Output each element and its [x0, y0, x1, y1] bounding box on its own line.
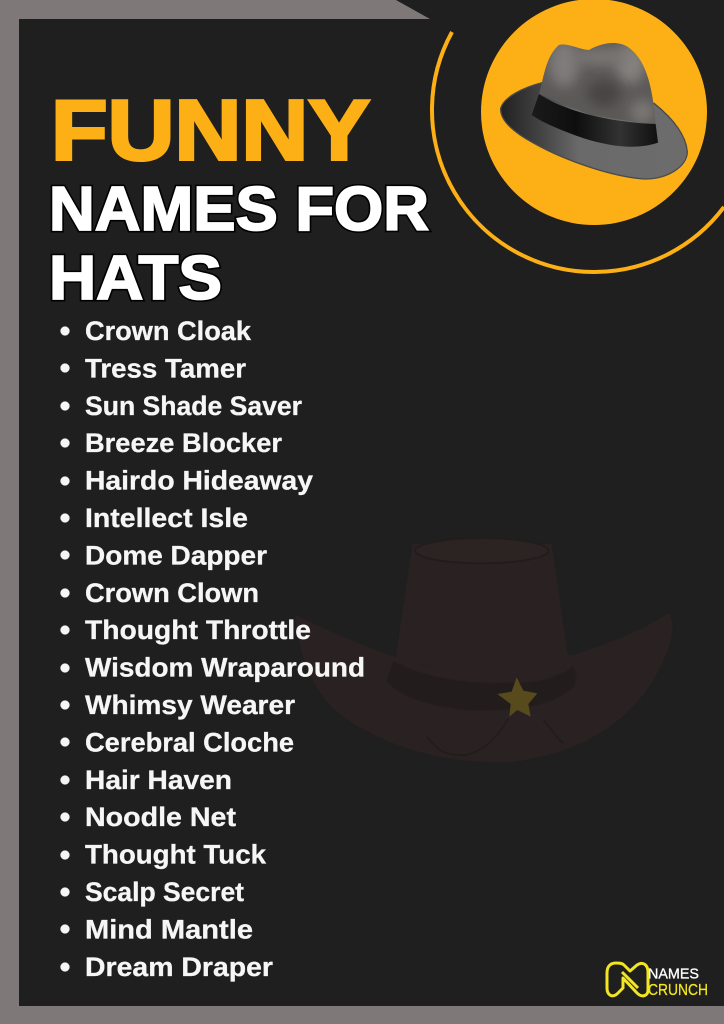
list of hat names: Thought Throttle — [85, 615, 311, 645]
watermark: cowboy hat — [295, 538, 672, 762]
hat brim — [501, 83, 687, 179]
logo text: NAMES: NAMES — [648, 966, 699, 982]
list of hat names: Breeze Blocker — [85, 428, 282, 458]
orange circle — [481, 0, 707, 225]
list of hat names: Scalp Secret — [85, 877, 244, 907]
list of hat names: Dome Dapper — [85, 540, 268, 570]
logo: Names Crunch — [607, 963, 708, 999]
list of hat names: Hairdo Hideaway — [85, 466, 313, 496]
list of hat names: Cerebral Cloche — [85, 727, 294, 757]
logo text: CRUNCH: CRUNCH — [648, 982, 708, 999]
hat band — [387, 662, 576, 710]
list of hat names: Tress Tamer — [85, 353, 246, 383]
list of hat names: Hair Haven — [85, 765, 232, 795]
logo icon — [607, 963, 648, 996]
icon: grey fedora hat — [501, 37, 687, 179]
list of hat names: Wisdom Wraparound — [85, 653, 365, 683]
hat crown — [539, 43, 656, 124]
title: NAMES FOR: NAMES FOR — [49, 175, 429, 244]
title: HATS: HATS — [49, 244, 222, 313]
band cords — [427, 718, 563, 755]
orange ring arc — [432, 32, 724, 272]
list of hat names: Sun Shade Saver — [85, 391, 302, 421]
hat brim — [295, 613, 672, 762]
title: NAMES FOR: NAMES FOR — [49, 175, 429, 244]
list of hat names: Crown Cloak — [85, 316, 252, 346]
list of hat names: Whimsy Wearer — [85, 690, 296, 720]
star — [497, 677, 537, 717]
title: HATS: HATS — [49, 244, 222, 313]
title: FUNNY: FUNNY — [51, 84, 370, 178]
crown opening — [415, 538, 548, 563]
hat crown — [395, 544, 569, 667]
list of hat names: Noodle Net — [85, 802, 236, 832]
list of hat names: Dream Draper — [85, 952, 274, 982]
hat band — [532, 94, 658, 147]
list of hat names: Crown Clown — [85, 578, 259, 608]
list of hat names: Mind Mantle — [85, 914, 253, 944]
list of hat names: Thought Tuck — [85, 840, 267, 870]
list of hat names — [60, 316, 365, 982]
list of hat names: Intellect Isle — [85, 503, 248, 533]
